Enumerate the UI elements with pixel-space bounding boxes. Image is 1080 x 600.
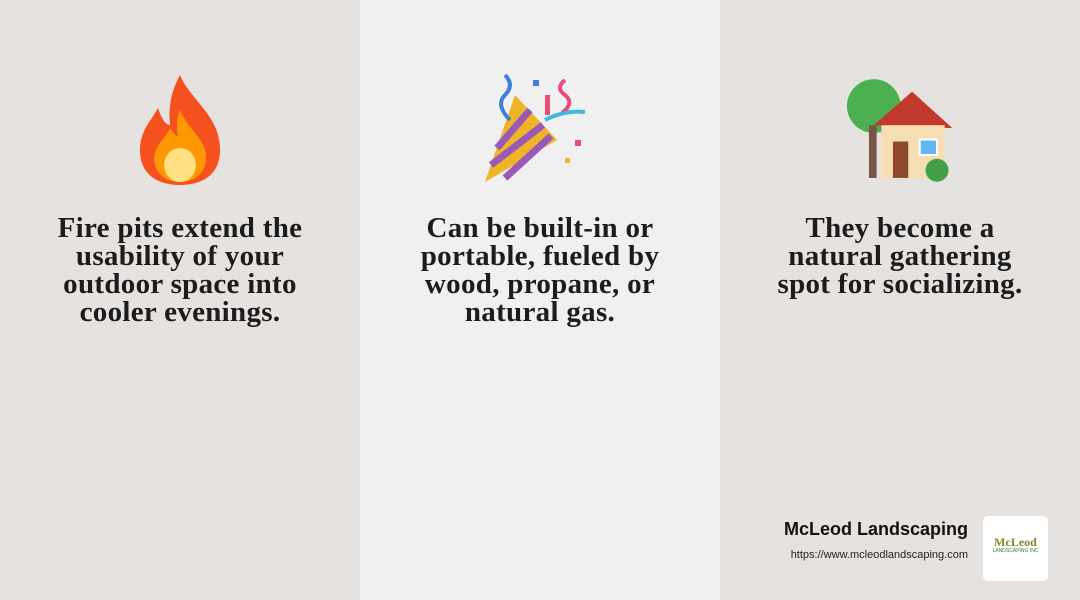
text: fire pits: Fire pits extend the usability of your outdoor space into cooler evenings. <box>58 212 302 328</box>
url: https://www.mcleodlandscaping.com <box>791 549 968 561</box>
text: built-in or portable: Can be built-in or portable, fueled by wood, propane, or natural gas. <box>421 212 659 328</box>
footer: brand <box>784 516 1048 581</box>
logo: McLeod <box>994 535 1037 549</box>
icon: party popper <box>485 74 585 182</box>
text: gathering spot: They become a natural gathering spot for socializing. <box>777 212 1022 300</box>
brand name: McLeod Landscaping <box>784 519 968 539</box>
logo <box>983 516 1048 581</box>
panel: left <box>0 0 360 600</box>
icon: house with tree <box>846 79 952 182</box>
panel: middle <box>360 0 720 600</box>
panel: right <box>720 0 1080 600</box>
icon: fire <box>140 75 220 185</box>
logo: LANDSCAPING INC <box>993 548 1038 554</box>
